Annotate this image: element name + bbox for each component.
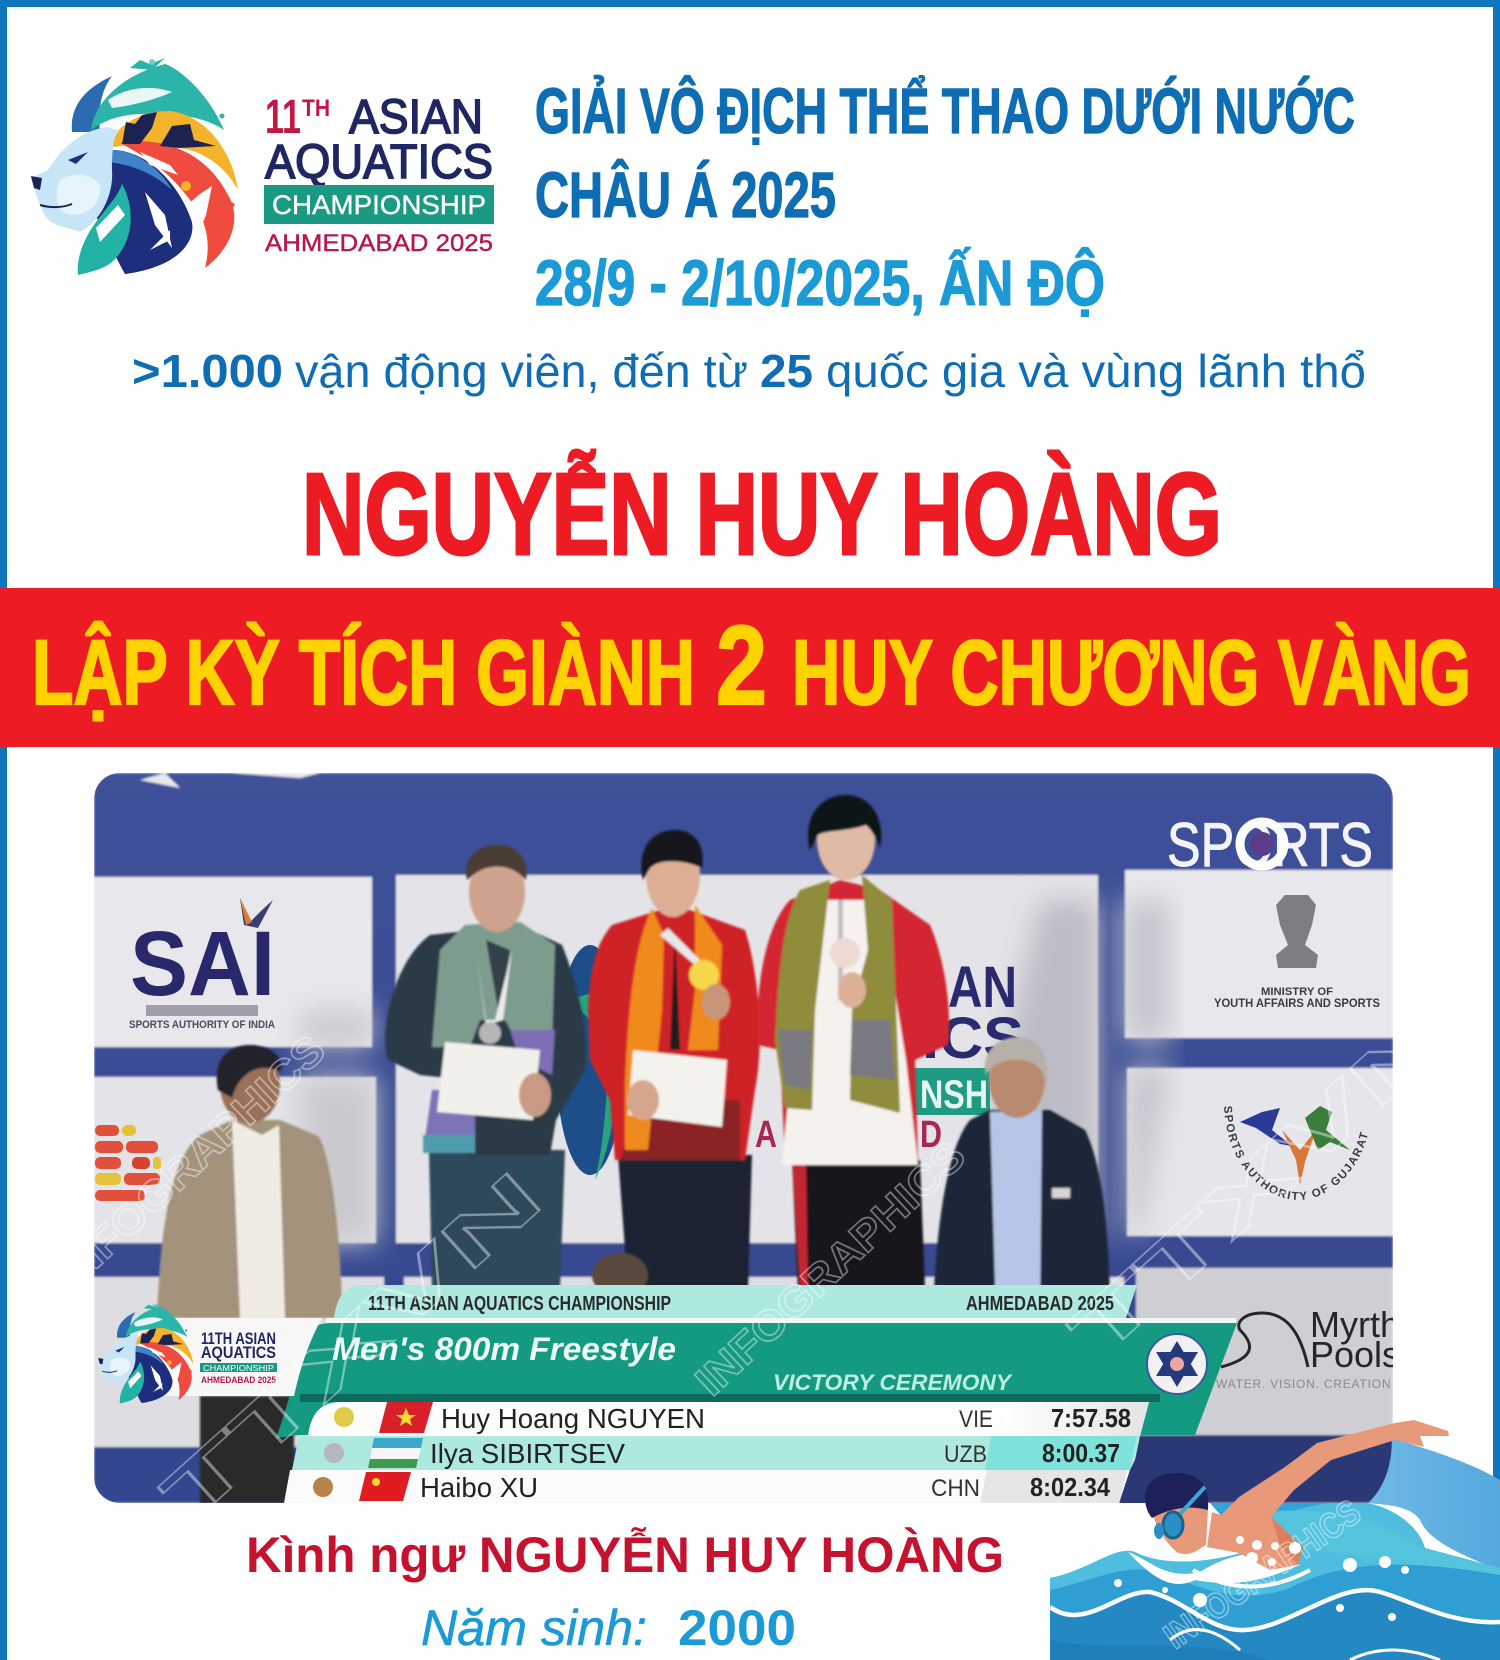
centre logo board [556, 945, 1024, 1180]
row: gold: 7:57.58 [1051, 1403, 1131, 1433]
participants line: quốc gia và vùng lãnh thổ [826, 345, 1366, 397]
row: bronze: 8:02.34 [1030, 1472, 1110, 1502]
centre logo board: ICS [922, 1006, 1024, 1071]
participants line: 25 [760, 345, 813, 397]
ministry board: SPORTS [1167, 811, 1373, 880]
row: gold: Huy Hoang NGUYEN [441, 1403, 705, 1434]
row: silver [324, 1438, 1120, 1469]
waves [1050, 1438, 1500, 1660]
centre logo board: NSH [920, 1073, 988, 1117]
banner headline: 2 [716, 603, 767, 728]
event title: CHÂU Á 2025 [535, 158, 836, 231]
logo wordmark: ASIAN [349, 91, 483, 144]
Myrtha Pools sponsor: Myrtha [1310, 1304, 1421, 1345]
row: bronze: CHN [931, 1475, 980, 1502]
scoreboard event logo: 11TH ASIAN [201, 1329, 276, 1348]
row: gold: VIE [959, 1406, 993, 1433]
swimmer [1145, 1420, 1449, 1570]
row: silver: UZB [944, 1441, 987, 1468]
green title panel [276, 1323, 1237, 1438]
official left [157, 1045, 342, 1503]
green title panel: VICTORY CEREMONY [773, 1370, 1013, 1395]
official right [933, 1037, 1110, 1318]
row: silver: 8:00.37 [1042, 1438, 1120, 1468]
event logo [31, 58, 494, 275]
centre logo board: AN [948, 955, 1017, 1020]
row: bronze: Haibo XU [420, 1472, 538, 1503]
Myrtha Pools sponsor: WATER. VISION. CREATION [1216, 1377, 1392, 1391]
gold medallist [588, 830, 760, 1290]
centre logo board: D [920, 1114, 942, 1156]
top strip [326, 1285, 1236, 1323]
banner headline: LẬP KỲ TÍCH GIÀNH [32, 621, 695, 724]
logo wordmark: 11 [265, 91, 301, 144]
caption: birth year: 2000 [678, 1600, 796, 1656]
scoreboard [276, 1285, 1237, 1503]
logo wordmark: AQUATICS [265, 136, 493, 189]
backdrop [94, 773, 1393, 1503]
caption: athlete name: Kình ngư NGUYỄN HUY HOÀNG [246, 1527, 1004, 1583]
watermarks: INFOGRAPHICS [686, 1132, 974, 1405]
green title panel: Men's 800m Freestyle [332, 1331, 676, 1367]
silver medallist [385, 845, 586, 1290]
bronze medallist [757, 795, 949, 1290]
row: gold [334, 1402, 1131, 1434]
ministry board: MINISTRY OF [1261, 986, 1333, 998]
federation badge [1147, 1334, 1207, 1394]
watermarks: TTXVN [147, 1156, 557, 1537]
watermarks [46, 993, 1465, 1657]
scoreboard event logo: AQUATICS [201, 1343, 276, 1362]
logo wordmark: CHAMPIONSHIP [272, 190, 486, 220]
scoreboard event logo: CHAMPIONSHIP [203, 1364, 274, 1373]
logo wordmark: TH [302, 95, 330, 122]
event title [535, 74, 1355, 231]
Myrtha Pools sponsor [1216, 1311, 1393, 1388]
ministry board [1167, 811, 1380, 1010]
watermarks: INFOGRAPHICS [1156, 1491, 1368, 1657]
caption: birth year: Năm sinh: [421, 1600, 647, 1656]
banner headline [32, 603, 1471, 728]
logo wordmark [264, 91, 494, 257]
swimmer illustration [1050, 1420, 1500, 1660]
row: bronze [313, 1472, 1110, 1503]
participants line [132, 345, 1366, 397]
participants line: >1.000 [132, 345, 283, 397]
caption: birth year [421, 1600, 796, 1656]
top strip: 11TH ASIAN AQUATICS CHAMPIONSHIP [368, 1293, 671, 1315]
red banner [0, 588, 1500, 747]
event dates: 28/9 - 2/10/2025, ẤN ĐỘ [535, 246, 1105, 319]
row: silver: Ilya SIBIRTSEV [430, 1438, 625, 1469]
lion mark [31, 58, 238, 275]
watermarks: INFOGRAPHICS [46, 1026, 334, 1299]
Gujarat sports authority logo: SPORTS AUTHORITY OF GUJARAT [1224, 1106, 1368, 1200]
SAI board: SAI [130, 913, 275, 1015]
scoreboard event logo [98, 1304, 322, 1404]
officials and medallists [157, 795, 1110, 1503]
centre logo board: A [755, 1114, 777, 1156]
logo wordmark: AHMEDABAD 2025 [265, 230, 493, 257]
top strip: AHMEDABAD 2025 [966, 1293, 1114, 1315]
result rows [284, 1402, 1149, 1503]
Myrtha Pools sponsor: Pools [1310, 1334, 1400, 1375]
ministry board: YOUTH AFFAIRS AND SPORTS [1214, 998, 1380, 1010]
podium photo [94, 773, 1393, 1503]
watermarks: TTXVN [1055, 993, 1465, 1374]
participants line: vận động viên, đến từ [295, 345, 748, 397]
scoreboard event logo: AHMEDABAD 2025 [201, 1375, 276, 1385]
SAI board: SPORTS AUTHORITY OF INDIA [129, 1019, 275, 1031]
red logo block [95, 1125, 161, 1201]
